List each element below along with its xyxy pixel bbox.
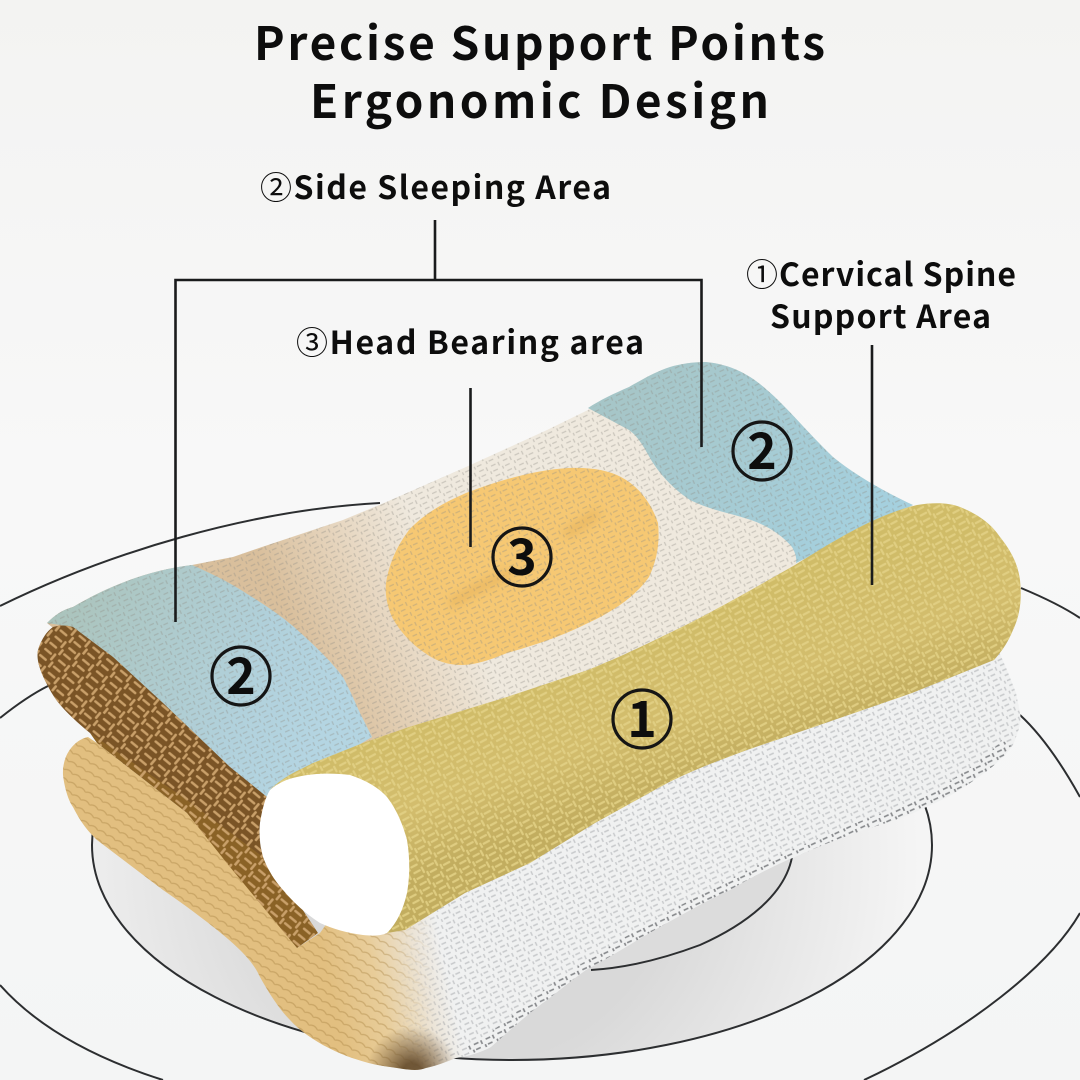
title: Ergonomic Design — [310, 66, 769, 132]
cervical roll — [270, 503, 1021, 933]
label: cervical spine support area: Support Area — [770, 292, 991, 338]
pillow top texture — [47, 362, 913, 800]
roll end cap — [260, 774, 409, 936]
marker 1 — [613, 680, 671, 752]
marker 3: 3 — [507, 518, 537, 590]
label: side sleeping area: ②Side Sleeping Area — [260, 163, 611, 209]
leader: cervical spine — [871, 345, 873, 585]
brown side band lower — [90, 733, 318, 948]
marker 2 left — [212, 637, 270, 709]
brown side band upper — [38, 626, 267, 857]
leader: head bearing — [469, 388, 472, 547]
marker 2 right — [733, 412, 791, 484]
title: Precise Support Points — [254, 8, 825, 74]
bracket: side sleeping area — [176, 220, 702, 622]
marker 3 — [493, 518, 551, 590]
title — [254, 8, 825, 132]
top pillow surface — [47, 362, 913, 800]
pillow illustration — [38, 362, 1040, 1080]
marker 2 left: 2 — [226, 637, 256, 709]
marker 1: 1 — [627, 680, 657, 752]
right blue zone — [588, 362, 913, 563]
platform rings — [0, 503, 1080, 1080]
label: cervical spine support area — [746, 250, 1016, 338]
left blue zone — [47, 565, 372, 800]
marker 2 right: 2 — [747, 412, 777, 484]
label: cervical spine support area: ①Cervical Spine — [746, 250, 1016, 296]
label: head bearing area: ③Head Bearing area — [296, 318, 644, 364]
head bearing oval — [386, 468, 659, 665]
bottom pillow layer — [40, 640, 1040, 1080]
